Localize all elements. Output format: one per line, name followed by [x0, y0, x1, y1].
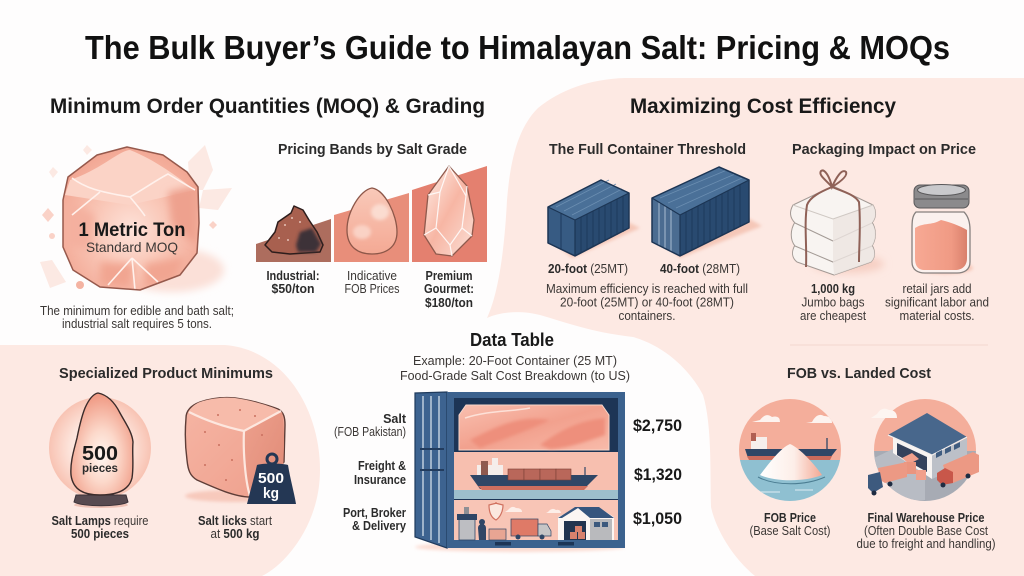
label: jumbo bags: [800, 282, 866, 323]
icon: salt lamp: [49, 393, 151, 508]
container description: [546, 282, 748, 323]
block caption: [40, 304, 234, 331]
label: indicative FOB prices: [344, 269, 400, 296]
container description: 20-foot (25MT) or 40-foot (28MT): [560, 296, 734, 310]
label: final warehouse price: [856, 511, 996, 551]
band: industrial: [256, 219, 331, 262]
label: final warehouse price: (Often Double Base Cost: [864, 524, 988, 538]
label: salt licks: at 500 kg: [210, 527, 260, 541]
container description: containers.: [618, 309, 676, 323]
row labels: Insurance: [354, 473, 406, 487]
port and delivery strip: [454, 500, 618, 540]
label: salt lamps: 500 pieces: [71, 527, 129, 541]
panel: specialized product minimums background: [0, 345, 320, 576]
label: retail jars: [885, 282, 989, 323]
lamp label: 500: [82, 442, 118, 465]
icon: 20-foot container: [548, 180, 640, 258]
heading: packaging impact: Packaging Impact on Price: [792, 141, 976, 158]
panel: packaging impact on price: [791, 141, 989, 323]
salt slab: [459, 405, 609, 450]
panel: FOB vs landed cost: [739, 365, 996, 551]
label: indicative FOB prices: FOB Prices: [344, 282, 400, 296]
label: industrial price: $50/ton: [272, 282, 314, 296]
panel: full container threshold: [546, 141, 762, 323]
heading: full container threshold: The Full Container Threshold: [549, 141, 746, 158]
icon: retail jar: [912, 184, 973, 274]
icon: premium crystal: [424, 166, 474, 256]
cost values: $1,320: [634, 466, 682, 484]
icon: FOB ship and salt pile: [739, 399, 841, 502]
cost values: [633, 417, 682, 528]
block label: 1 Metric Ton: [78, 219, 186, 241]
label: premium gourmet price: Premium: [426, 269, 472, 283]
block label: [78, 219, 186, 255]
label: FOB price: (Base Salt Cost): [750, 524, 830, 538]
label: indicative FOB prices: Indicative: [347, 269, 397, 283]
icon: container cross-section: [415, 392, 625, 552]
heading: maximizing cost efficiency: Maximizing Cost Efficiency: [630, 95, 896, 118]
row labels: (FOB Pakistan): [334, 425, 406, 439]
label: premium gourmet price: $180/ton: [425, 296, 473, 310]
panel: data table: [334, 330, 682, 552]
shipping strip: [454, 452, 618, 499]
row labels: Port, Broker: [343, 506, 406, 520]
lamp label: [82, 442, 118, 475]
label: jumbo bags: are cheapest: [800, 309, 866, 323]
container door: [415, 392, 447, 548]
truck: right: [937, 452, 979, 488]
band: indicative: [334, 193, 409, 262]
label: salt licks: Salt licks start: [198, 514, 272, 528]
label: jumbo bags: 1,000 kg: [811, 282, 855, 296]
icon: crystal shards behind block: [40, 145, 232, 289]
label: salt lamps: Salt Lamps require: [52, 514, 149, 528]
cost values: $1,050: [633, 510, 682, 528]
icon: edible salt rock: [347, 188, 397, 254]
label: salt lamps: [52, 514, 149, 541]
label: 40-foot: 40-foot (28MT): [660, 262, 740, 276]
label: premium gourmet price: [424, 269, 474, 310]
label: retail jars: significant labor and: [885, 296, 989, 310]
title: The Bulk Buyer’s Guide to Himalayan Salt: Pricing & MOQs: [85, 29, 950, 66]
label: premium gourmet price: Gourmet:: [424, 282, 474, 296]
label: jumbo bags: Jumbo bags: [802, 296, 864, 310]
icon: warehouse with trucks: [868, 399, 979, 502]
label: final warehouse price: Final Warehouse Price: [868, 511, 985, 525]
band: premium: [412, 166, 487, 262]
label: 20-foot: 20-foot (25MT): [548, 262, 628, 276]
icon: jumbo bag: [791, 170, 884, 275]
label: final warehouse price: due to freight and handling): [856, 537, 996, 551]
label: salt licks: [198, 514, 272, 541]
icon: salt lick cube: [185, 398, 285, 502]
shadow under block: [120, 248, 224, 292]
label: industrial price: Industrial:: [266, 269, 320, 283]
row labels: Freight &: [358, 459, 406, 473]
container description: Maximum efficiency is reached with full: [546, 282, 748, 296]
block caption: The minimum for edible and bath salt;: [40, 304, 234, 318]
heading: minimum order quantities: Minimum Order Quantities (MOQ) & Grading: [50, 95, 485, 118]
data table subtitle: Example: 20-Foot Container (25 MT): [413, 353, 617, 368]
heading: specialized minimums: Specialized Product Minimums: [59, 365, 273, 382]
data table subtitle: [400, 353, 630, 383]
block label: Standard MOQ: [86, 239, 178, 255]
icon: 500 kg weight: [247, 454, 296, 504]
row labels: & Delivery: [352, 519, 406, 533]
label: FOB price: FOB Price: [764, 511, 816, 525]
panel: maximizing cost efficiency background: [487, 78, 1024, 576]
row labels: [334, 412, 407, 533]
block caption: industrial salt requires 5 tons.: [62, 317, 212, 331]
label: FOB price: [750, 511, 830, 538]
row labels: Salt: [383, 412, 407, 426]
lamp label: pieces: [82, 463, 118, 475]
panel: specialized product minimums: [49, 365, 296, 541]
data table subtitle: Food-Grade Salt Cost Breakdown (to US): [400, 368, 630, 383]
icon: industrial rock salt: [265, 206, 323, 254]
cost values: $2,750: [633, 417, 682, 435]
icon: 500 kg weight: kg: [263, 486, 279, 502]
heading: FOB vs landed: FOB vs. Landed Cost: [787, 365, 931, 382]
label: retail jars: material costs.: [900, 309, 974, 323]
label: retail jars: retail jars add: [902, 282, 972, 296]
panel: one metric ton MOQ: [40, 145, 234, 331]
icon: 40-foot container: [652, 167, 762, 258]
label: industrial price: [266, 269, 320, 296]
heading: data table: Data Table: [470, 330, 554, 350]
panel: pricing bands by salt grade: [256, 141, 487, 310]
icon: salt block: [63, 147, 199, 290]
heading: pricing bands: Pricing Bands by Salt Grade: [278, 141, 467, 158]
icon: 500 kg weight: 500: [258, 471, 284, 487]
truck: left: [868, 462, 907, 496]
